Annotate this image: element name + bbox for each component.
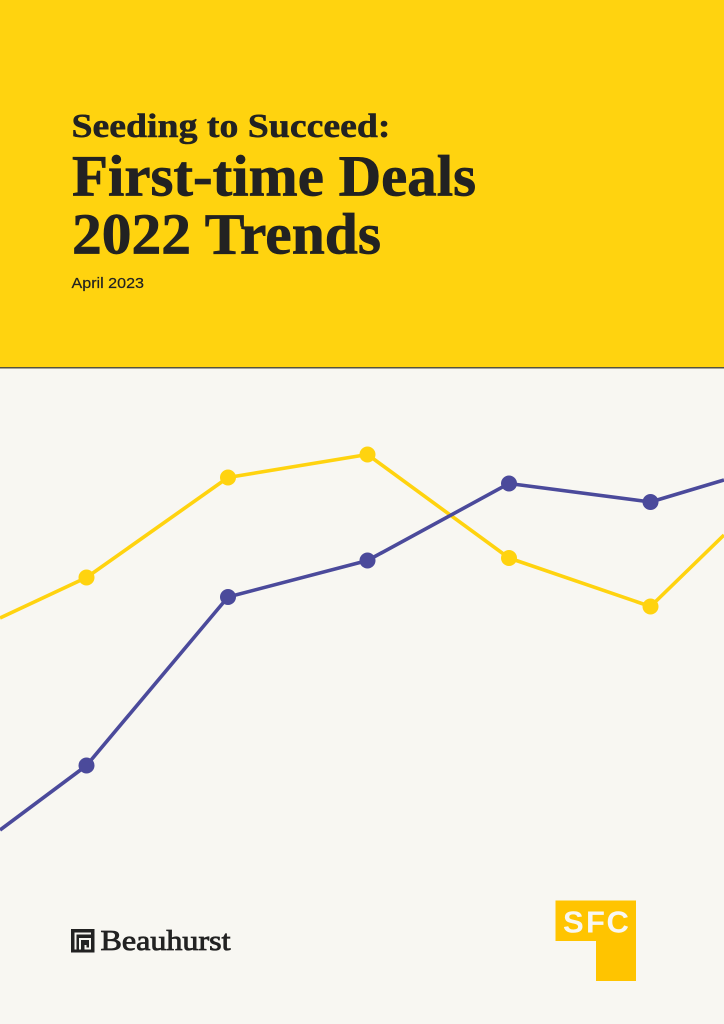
title line: First-time Deals: First-time Deals — [72, 144, 476, 208]
SFC logo letters: SFC — [563, 904, 629, 940]
SFC logo shape — [556, 900, 636, 981]
line chart — [0, 446, 724, 830]
yellow header panel — [0, 0, 724, 368]
title block — [72, 108, 476, 292]
blue data series — [0, 476, 724, 830]
icon: Beauhurst square mark — [71, 929, 94, 952]
SFC logo — [556, 900, 636, 981]
title line: 2022 Trends: 2022 Trends — [72, 202, 381, 266]
Beauhurst wordmark: Beauhurst — [100, 926, 231, 957]
subtitle: Seeding to Succeed: Seeding to Succeed: — [72, 108, 390, 145]
header divider line — [0, 367, 724, 368]
date: April 2023 — [72, 276, 144, 292]
Beauhurst logo — [71, 926, 231, 957]
yellow data series — [0, 446, 724, 618]
